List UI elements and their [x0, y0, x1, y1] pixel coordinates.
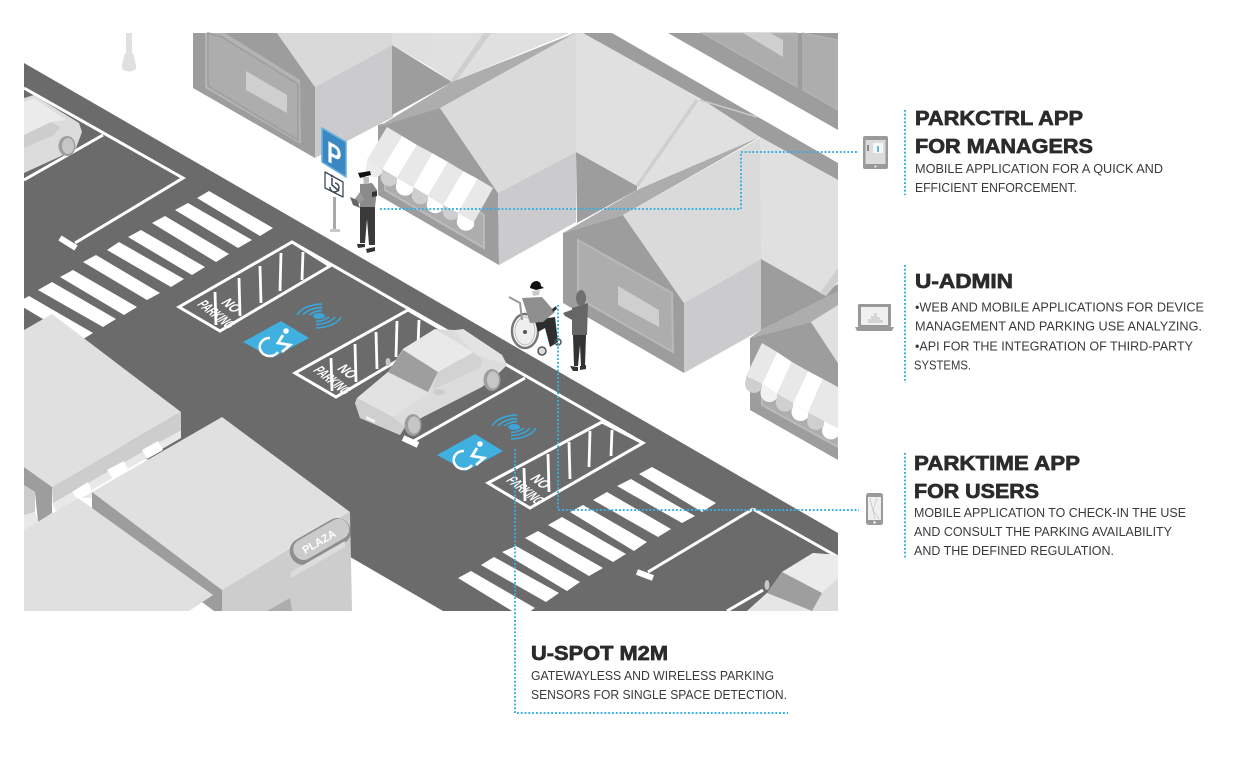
- rule: managers text: [904, 110, 906, 195]
- no parking zone 1: [179, 242, 330, 331]
- text block: ParkTime app: AND CONSULT THE PARKING AVAILABILITY: [914, 524, 1172, 539]
- parking markings upper left: [24, 88, 183, 248]
- text block: ParkTime app: FOR USERS: [914, 481, 1039, 503]
- text block: ParkCtrl app: MOBILE APPLICATION FOR A QUICK AND: [915, 161, 1163, 176]
- awning 2: [745, 343, 838, 439]
- no parking zone 3: [488, 422, 643, 508]
- text block: ParkTime app: MOBILE APPLICATION TO CHECK-IN THE USE: [914, 505, 1186, 520]
- text block: ParkTime app: [914, 453, 1186, 558]
- sensor waves 2: [492, 415, 536, 439]
- building 2 with awning: [378, 33, 838, 265]
- text block: ParkCtrl app: PARKCTRL APP: [915, 108, 1083, 130]
- crosswalk upper: [16, 191, 273, 341]
- connector: users app: [558, 305, 859, 510]
- no parking zone 1: NO: [217, 297, 245, 315]
- car bottom right: [747, 553, 838, 611]
- building 1 upper row: [193, 33, 570, 158]
- no parking zone 2: PARKING: [309, 365, 355, 397]
- icon: tablet: [863, 136, 888, 169]
- parking sign: [322, 128, 346, 232]
- text block: ParkCtrl app: [915, 108, 1163, 195]
- text block: ParkTime app: AND THE DEFINED REGULATION.: [914, 543, 1114, 558]
- icon: phone: [866, 493, 883, 525]
- rule: admin text: [904, 265, 906, 383]
- text block: ParkCtrl app: FOR MANAGERS: [915, 136, 1093, 158]
- no parking zone 2: [295, 310, 446, 397]
- no parking zone 1: PARKING: [193, 299, 239, 331]
- accessible marking 1: [243, 321, 309, 358]
- no parking zone 3: NO: [526, 473, 554, 491]
- parking markings lower right: [292, 242, 838, 611]
- building A lower left: [24, 314, 181, 530]
- shop window: [384, 183, 485, 250]
- car middle: [355, 329, 507, 436]
- connector: managers app: [380, 152, 859, 209]
- plaza sign: [290, 518, 351, 578]
- person in wheelchair: [509, 281, 561, 355]
- standing woman: [563, 290, 588, 371]
- building 3: [563, 137, 838, 373]
- text block: U-Admin: •API FOR THE INTEGRATION OF THIRD-PARTY: [915, 338, 1193, 354]
- road: [24, 63, 838, 611]
- text block: U-Admin: SYSTEMS.: [914, 358, 971, 372]
- awning 1: [366, 127, 493, 231]
- no parking zone 3: PARKING: [502, 475, 548, 507]
- text block: ParkTime app: PARKTIME APP: [914, 453, 1080, 475]
- building B lower centre: [92, 417, 356, 611]
- text block: U-Spot M2M: U-SPOT M2M: [531, 643, 668, 665]
- text block: U-Admin: MANAGEMENT AND PARKING USE ANALYZING.: [915, 318, 1202, 334]
- text block: U-Spot M2M: GATEWAYLESS AND WIRELESS PARKING: [531, 668, 774, 683]
- building top right: [668, 33, 838, 130]
- sensor waves 1: [297, 304, 341, 328]
- text block: ParkCtrl app: EFFICIENT ENFORCEMENT.: [915, 180, 1077, 195]
- parking sign: P: [327, 134, 341, 176]
- text block: U-Spot M2M: [531, 643, 787, 702]
- icon: laptop: [855, 304, 894, 331]
- accessible marking 2: [437, 434, 503, 471]
- building C lower left: [24, 498, 213, 611]
- text block: U-Spot M2M: SENSORS FOR SINGLE SPACE DETECTION.: [531, 687, 787, 702]
- text block: U-Admin: U-ADMIN: [915, 271, 1013, 293]
- parking officer: [350, 171, 377, 253]
- rule: parktime text: [904, 453, 906, 558]
- plaza sign: PLAZA: [301, 528, 338, 557]
- lamp post: [122, 33, 136, 72]
- car top left: [24, 95, 82, 173]
- crosswalk lower: [458, 467, 716, 617]
- building 4 far right with awning: [745, 305, 838, 460]
- no parking zone 2: NO: [333, 363, 361, 381]
- illustration: isometric street scene: [16, 33, 838, 617]
- text block: U-Admin: [914, 271, 1204, 372]
- text block: U-Admin: •WEB AND MOBILE APPLICATIONS FOR DEVICE: [915, 300, 1204, 314]
- connector: sensors: [515, 449, 788, 713]
